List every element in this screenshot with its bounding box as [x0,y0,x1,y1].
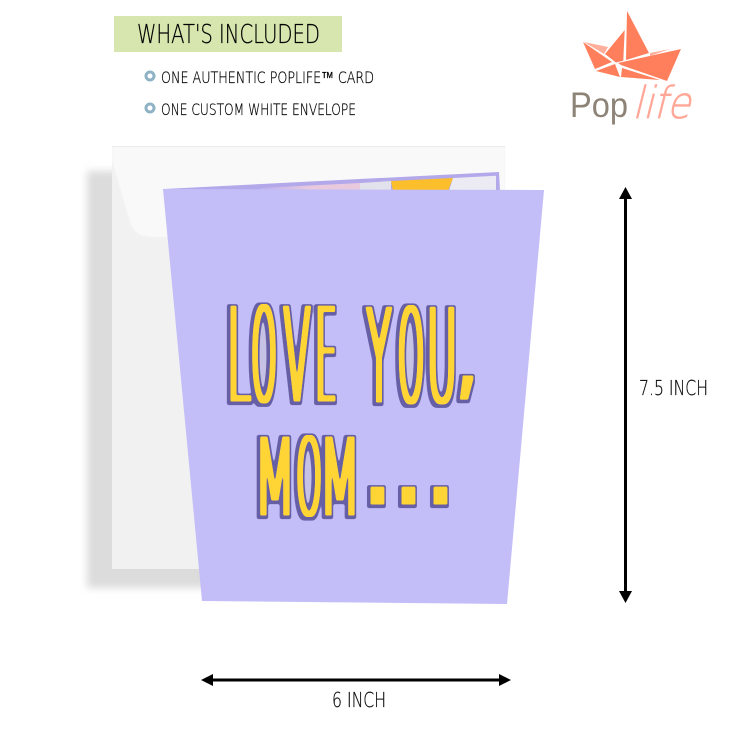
line two: O [297,416,321,541]
line one: V [284,280,310,432]
logo wordmark [570,78,700,129]
line one: Y [367,282,391,433]
heading: what's included [114,16,342,52]
icon: paper boat [583,11,681,81]
envelope body [112,146,505,569]
label: 7.5 inch: 7.5 INCH [639,376,708,400]
counters of the letter O [258,318,417,506]
line two: M [255,418,295,541]
envelope flap [112,147,505,237]
line one [227,264,490,434]
card front [163,189,544,604]
label: 6 inch: 6 INCH [332,688,386,712]
letters [227,251,490,568]
line two: M [320,418,360,541]
line one: , [446,264,490,415]
arrow: width [201,674,511,686]
heading: what's included: WHAT'S INCLUDED [137,20,320,50]
line one: L [227,280,251,432]
line two: . [378,251,439,568]
line one: U [427,282,457,433]
logo wordmark: life [629,78,700,129]
envelope shadow [87,171,387,588]
envelope with drop shadow [87,146,505,588]
item: card: ONE AUTHENTIC POPLIFE™ CARD [161,68,374,87]
logo: Poplife [570,11,700,129]
line one: E [316,282,336,433]
line one: O [252,281,276,433]
logo wordmark: Pop [570,86,628,125]
line two [255,251,471,568]
arrow: height [619,187,632,603]
line two: . [410,251,471,568]
inner card peeking out [164,172,500,191]
line two: . [347,251,408,568]
card lettering: love you, mom... [227,251,490,568]
list: included items [146,68,374,119]
item: envelope: ONE CUSTOM WHITE ENVELOPE [161,100,356,119]
line one: O [398,283,424,434]
